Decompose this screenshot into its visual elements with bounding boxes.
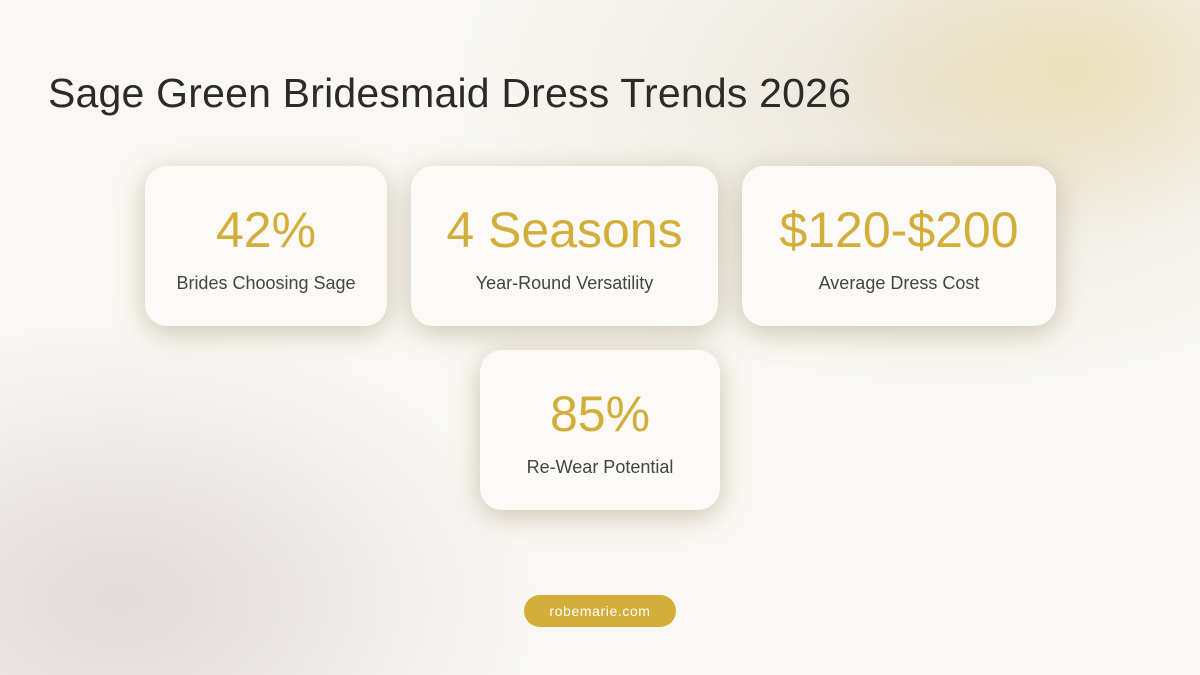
card: re-wear potential: 85% xyxy=(550,386,650,442)
card: re-wear potential xyxy=(480,350,720,510)
title: Sage Green Bridesmaid Dress Trends 2026 xyxy=(48,70,851,116)
card: re-wear potential: Re-Wear Potential xyxy=(527,457,673,477)
card: year-round versatility: Year-Round Versatility xyxy=(476,273,653,293)
card: brides choosing sage xyxy=(145,166,387,326)
card: average dress cost xyxy=(742,166,1056,326)
footer pill: robemarie.com xyxy=(549,603,651,619)
card: average dress cost: $120-$200 xyxy=(779,202,1019,258)
card: year-round versatility xyxy=(411,166,718,326)
footer pill xyxy=(524,595,676,627)
card: year-round versatility: 4 Seasons xyxy=(446,202,683,258)
card: brides choosing sage: 42% xyxy=(216,202,316,258)
card: brides choosing sage: Brides Choosing Sage xyxy=(176,273,356,293)
card: average dress cost: Average Dress Cost xyxy=(819,273,979,293)
